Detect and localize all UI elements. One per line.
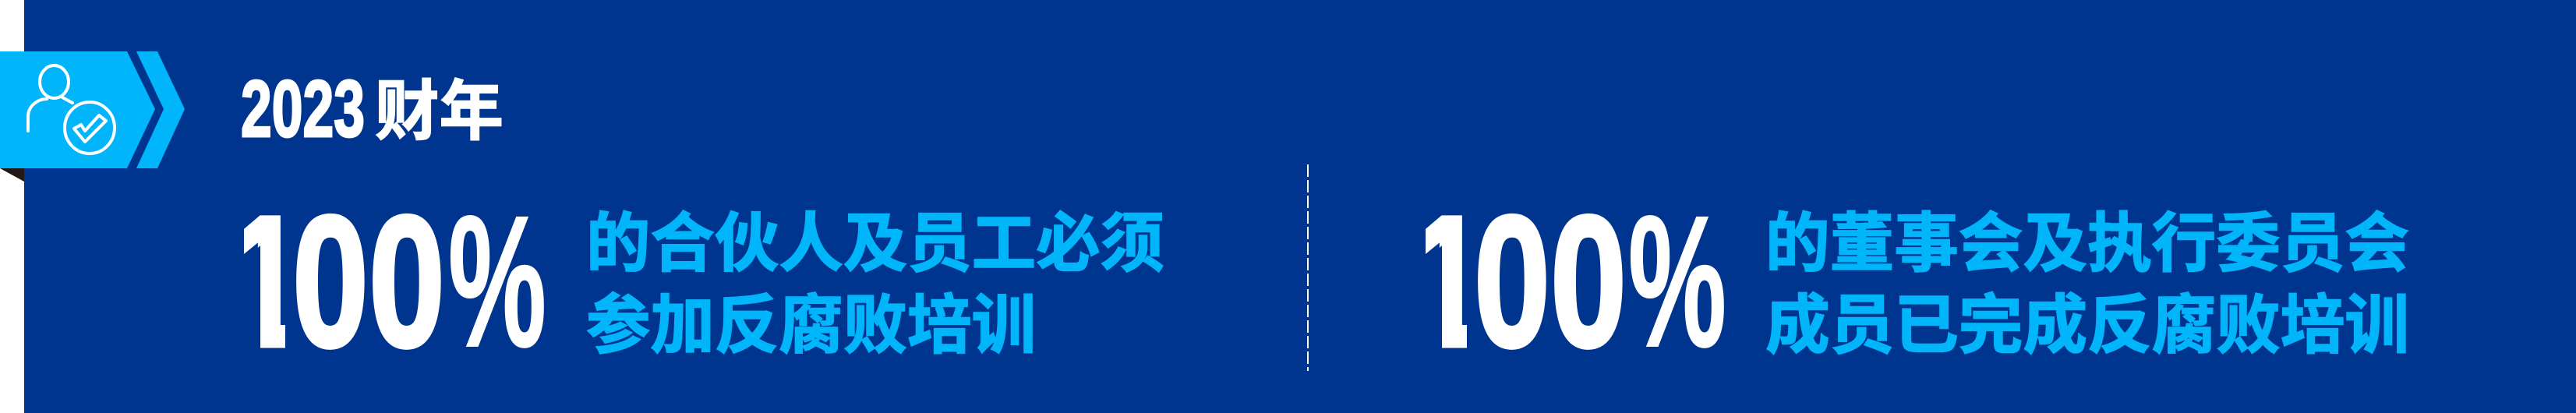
ribbon: light blue arrow tag xyxy=(0,51,185,168)
text: board and executive committee description: 成员已完成反腐败培训 xyxy=(1765,289,2409,362)
heading: fiscal year 2023: 财年 xyxy=(375,75,504,148)
text: partners and employees description xyxy=(586,207,1164,362)
number: 100 percent: % xyxy=(1628,177,1726,386)
stat: partners and employees xyxy=(244,209,1164,355)
heading: fiscal year 2023 xyxy=(241,64,504,154)
heading: fiscal year 2023: 2023 xyxy=(241,64,365,154)
text: partners and employees description: 参加反腐败培训 xyxy=(586,289,1036,362)
number: 100 percent xyxy=(244,214,544,350)
number: 100 percent: % xyxy=(448,177,546,386)
icon: person with check badge xyxy=(28,65,115,154)
text: partners and employees description: 的合伙人及员工必须 xyxy=(586,207,1164,280)
number: 100 percent: 1 xyxy=(1408,177,1487,386)
ribbon fold shadow xyxy=(0,168,24,182)
text: board and executive committee description: 的董事会及执行委员会 xyxy=(1765,207,2409,280)
number: 100 percent: 1 xyxy=(226,177,306,386)
number: 100 percent: 00 xyxy=(292,177,445,386)
stat: board and executive committee xyxy=(1426,209,2408,355)
text: board and executive committee description xyxy=(1765,207,2409,362)
number: 100 percent xyxy=(1426,214,1724,350)
number: 100 percent: 00 xyxy=(1474,177,1627,386)
